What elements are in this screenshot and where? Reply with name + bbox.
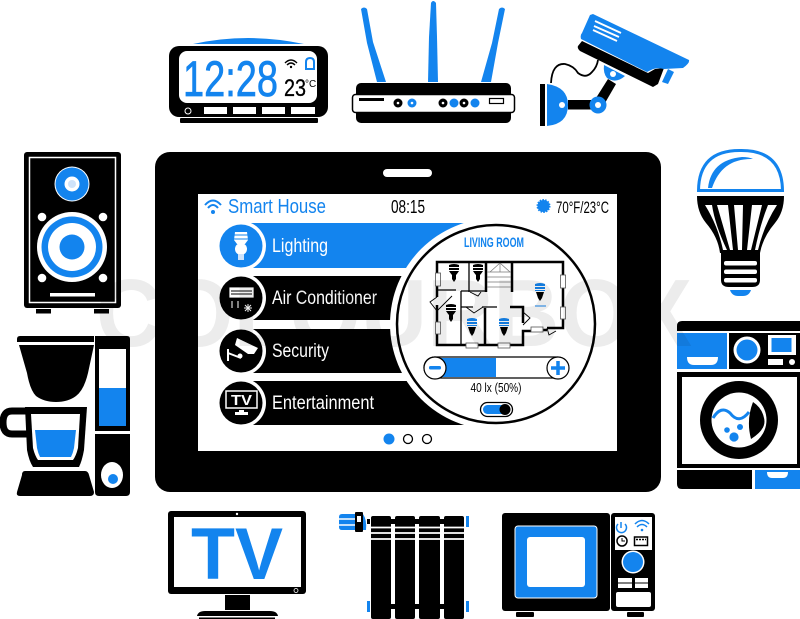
tablet	[155, 152, 661, 492]
living room heading: LIVING ROOM	[464, 234, 524, 250]
page indicator dots	[384, 434, 432, 444]
alarm clock: °C	[305, 79, 316, 90]
menu: lighting: Lighting	[272, 236, 328, 257]
speaker	[24, 152, 121, 314]
tablet speaker slot	[383, 169, 432, 177]
floor plan	[430, 262, 566, 348]
television	[168, 511, 306, 619]
header bar: 08:15	[391, 197, 425, 217]
header bar: Smart House	[228, 196, 326, 218]
brightness value: 40 lx (50%)	[470, 380, 522, 395]
security camera	[540, 14, 689, 126]
menu: security: Security	[272, 341, 329, 362]
header bar	[205, 196, 609, 218]
menu: lighting	[216, 221, 465, 271]
menu: entertainment: Entertainment	[272, 393, 375, 414]
alarm clock	[169, 38, 328, 123]
brightness slider	[424, 357, 569, 379]
toggle switch	[480, 402, 512, 416]
menu: air conditioner	[216, 273, 465, 323]
coffee machine	[3, 336, 130, 496]
tablet screen	[198, 194, 617, 451]
menu: security	[216, 326, 465, 376]
washing machine	[677, 321, 800, 489]
header bar: 70°F/23°C	[556, 198, 609, 217]
radiator with smart thermostat	[339, 512, 469, 619]
alarm clock: 12:28	[183, 51, 278, 107]
living room control circle	[390, 218, 602, 430]
alarm clock: 23	[284, 75, 306, 102]
led bulb	[697, 150, 784, 296]
menu: air conditioner: Air Conditioner	[272, 288, 378, 309]
wifi router	[352, 1, 514, 123]
television: TV	[191, 514, 283, 595]
menu: entertainment	[216, 378, 465, 428]
menu: entertainment: TV	[231, 392, 252, 409]
smart microwave	[502, 513, 655, 617]
watermark: COLOURBOX	[96, 260, 692, 367]
